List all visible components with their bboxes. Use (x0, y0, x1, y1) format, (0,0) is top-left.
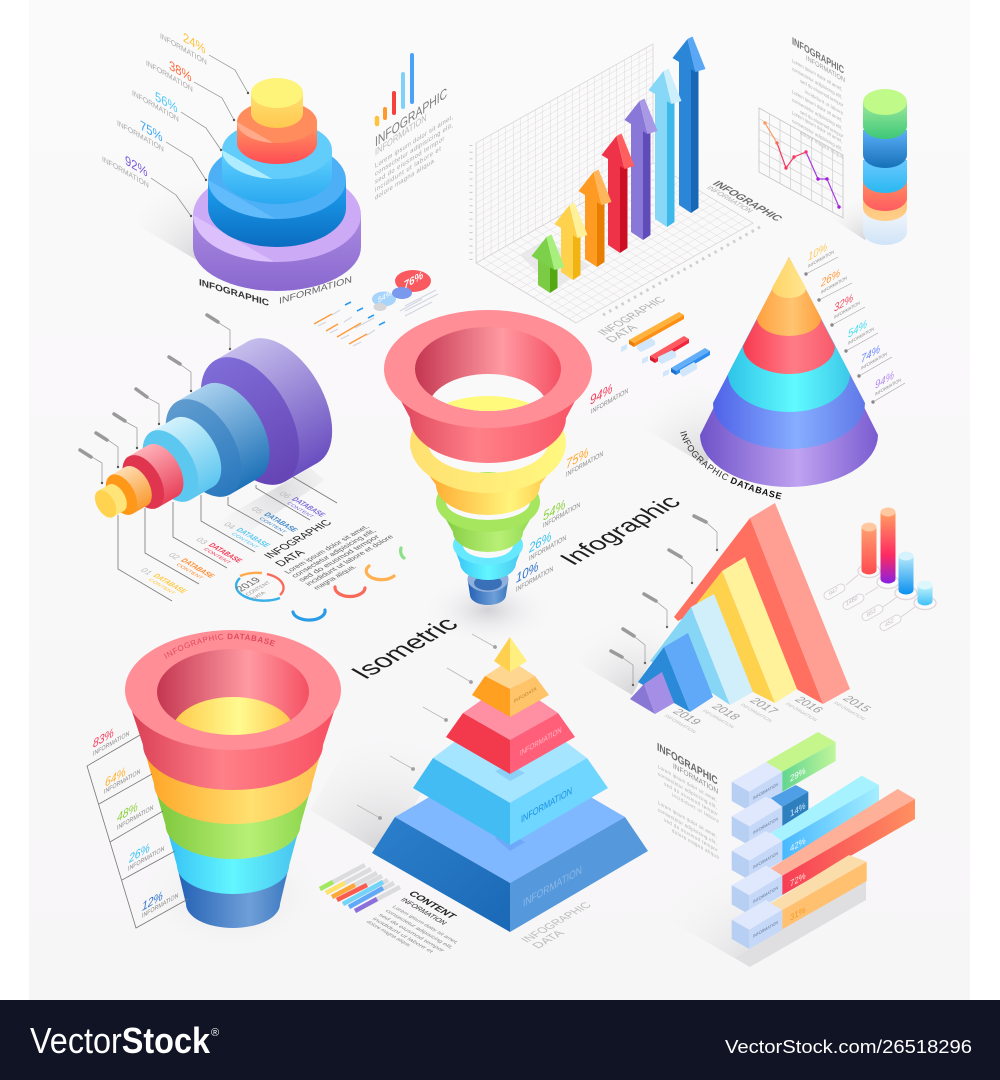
pyramid labels: INFORMATION (521, 785, 572, 826)
database labels: CONTENT (202, 547, 232, 565)
year labels: INFORMATION (738, 703, 774, 723)
top right text block: INFOGRAPHIC (792, 36, 844, 77)
level: light blue (413, 700, 608, 851)
year labels: 2015 (839, 693, 875, 714)
level: orange (472, 660, 549, 717)
database labels: 02 (166, 551, 183, 561)
title: Isometric: Isometric (344, 613, 465, 683)
bottom right bar text block: dolore magna aliqua (672, 828, 719, 861)
footer logo: VectorStock (30, 1020, 211, 1061)
year labels: 2017 (746, 695, 782, 716)
database labels: 03 (194, 536, 211, 546)
base rings (858, 564, 936, 610)
cone labels: INFOGRAPHIC DATABASE (680, 431, 782, 500)
small percentage list (314, 269, 438, 346)
mini bar icon and info text: sed do eiusmod tempor (375, 135, 445, 186)
database labels: DATABASE (289, 496, 328, 518)
step: 2017 light blue (650, 594, 753, 705)
database labels: CONTENT (174, 563, 204, 580)
row 5: 31%: INFORMATION (753, 919, 778, 939)
database labels: CONTENT (285, 501, 315, 519)
database labels: CONTENT (257, 517, 287, 534)
pyramid labels (514, 686, 582, 910)
funnel labels: INFORMATION (516, 565, 553, 594)
funnel labels: 26% (528, 528, 552, 557)
cylinder: orange (99, 461, 158, 520)
row 4: 72% (732, 789, 915, 914)
lower left funnel (125, 630, 341, 928)
funnel labels (516, 380, 628, 594)
lower left funnel: INFOGRAPHIC DATABASE (164, 634, 276, 658)
lower funnel labels: 12% (142, 888, 163, 914)
cone labels: INFORMATION (821, 275, 847, 295)
stacked cylinder labels: 92% (125, 152, 148, 180)
funnel labels: INFORMATION (591, 387, 628, 416)
cylinder: light blue (131, 407, 233, 511)
lower funnel labels: 64% (105, 764, 126, 790)
stacked cylinder labels: INFORMATION (102, 154, 149, 190)
database labels: CONTENT (229, 532, 260, 550)
lower left funnel shadow (143, 837, 323, 953)
isometric arrow chart (471, 36, 785, 323)
lower funnel labels: 26% (128, 840, 150, 867)
top right text block (792, 36, 845, 161)
layer: blue (208, 141, 346, 247)
row 2: 14%: 14% (790, 800, 806, 819)
database labels: CONTENT (146, 578, 177, 596)
funnel labels: 94% (590, 380, 613, 408)
bottom right bar text block: sed do eiusmod tempor (664, 817, 718, 854)
top right text block: consectetur adipisicing elit, (792, 118, 842, 153)
bars shadow (735, 881, 866, 967)
circle 2019: 2019 (234, 576, 264, 594)
row 2: 14%: INFORMATION (753, 816, 778, 836)
funnel labels: 54% (543, 496, 566, 524)
stacked cylinder labels: 38% (169, 57, 192, 85)
footer bar (0, 1000, 1000, 1080)
infographic data text: Lorem ipsum dolor sit amet, (282, 523, 371, 575)
stacked cylinder labels: 56% (155, 88, 178, 116)
isometric line chart (759, 108, 843, 218)
top right text block: sed do eiusmod tempor (800, 109, 844, 140)
lower funnel labels: 48% (117, 799, 138, 825)
lower funnel labels: INFORMATION (142, 892, 179, 920)
funnel labels: 75% (566, 444, 589, 472)
step: 2018 blue (638, 633, 713, 712)
ring: red (384, 310, 592, 463)
cone labels: 74% (861, 343, 880, 366)
database labels: 05 (249, 505, 266, 515)
database labels: 06 (277, 490, 294, 500)
row 1: 29% (732, 732, 836, 811)
bottom right bar text block: sed do eiusmod tempor (664, 781, 718, 818)
row 1: 29%: 29% (790, 765, 806, 784)
funnel labels: INFORMATION (566, 450, 603, 479)
content text: sed do eiusmod tempor (376, 913, 446, 953)
columns (862, 508, 932, 606)
row 4: 72%: 72% (790, 870, 806, 889)
pyramid labels: INFORMATION (520, 725, 562, 758)
mini bar icon and info text: INFORMATION (375, 112, 427, 159)
ring arcs (293, 548, 404, 620)
pyramid labels: INFORMATION (523, 864, 582, 910)
mini column chart (822, 508, 936, 632)
funnel labels: INFORMATION (529, 534, 566, 563)
stepped pyramid (357, 634, 648, 951)
mini bar icon and info text: INFOGRAPHIC (375, 84, 447, 150)
database labels: DATABASE (206, 542, 245, 564)
content text (364, 890, 460, 954)
arrow: purple (624, 98, 658, 240)
content text: INFORMATION (398, 896, 449, 926)
step: 2016 yellow (697, 557, 797, 703)
arrow: green (532, 234, 564, 293)
database labels: DATABASE (262, 511, 300, 534)
cylinder: red (114, 437, 192, 516)
value pills: 452 (885, 618, 894, 629)
top right text block: INFORMATION (806, 55, 845, 85)
pyramid labels: INFODATA (514, 686, 537, 705)
infographic data text: sed do eiusmod tempor (296, 533, 382, 583)
layer: yellow (251, 78, 303, 128)
registered mark: ® (211, 1027, 219, 1039)
mini bar icon and info text: incididunt ut labore et (375, 145, 441, 194)
top right text block: consectetur adipisicing elit, (792, 97, 842, 132)
cone labels: 10% (808, 241, 827, 264)
content text: dolore magna aliqua. (364, 920, 413, 948)
layer: purple (193, 168, 361, 291)
stacked column right (863, 89, 907, 245)
row 5: 31%: 31% (790, 904, 806, 923)
content mini bar chart (320, 865, 460, 954)
row 4: 72%: INFORMATION (753, 885, 778, 905)
row 3: 42% (732, 776, 879, 880)
lower funnel labels: INFORMATION (117, 804, 154, 832)
small 3D bars with data title: DATA (602, 322, 641, 345)
circle 2019: DATA (251, 591, 268, 601)
arrow: red (602, 134, 634, 253)
top right text block: consectetur adipisicing elit, (792, 66, 842, 101)
floor shadows (120, 145, 885, 967)
ring: blue (468, 566, 508, 605)
top right text block: Lorem ipsum dolor sit amet, (792, 110, 842, 145)
mini bar icon and info text (375, 55, 453, 202)
top right text block: incididunt ut labore (805, 89, 843, 117)
arrow: yellow (554, 202, 588, 280)
layer: orange (237, 101, 317, 164)
year labels: INFORMATION (662, 714, 698, 734)
infographic data text: magna aliqua. (311, 563, 359, 591)
top right text block: sed do eiusmod tempor (800, 78, 844, 109)
lower funnel labels: INFORMATION (128, 845, 165, 873)
value pills (822, 575, 915, 632)
year labels: INFORMATION (783, 702, 819, 722)
year labels: 2016 (791, 694, 827, 715)
ring: yellow (410, 430, 566, 515)
content text: incididunt ut labore et (370, 917, 435, 954)
year labels: INFORMATION (831, 701, 867, 721)
stacked cylinder labels: INFORMATION (132, 88, 179, 124)
year labels: 2018 (708, 701, 744, 722)
level: tip (494, 637, 527, 672)
content text: CONTENT (405, 890, 458, 921)
stacked cylinder labels: INFORMATION (117, 118, 164, 154)
leader pills (80, 315, 231, 484)
infographic data text: DATA (273, 548, 308, 569)
year labels: 2019 (669, 706, 705, 727)
small percentage list: 54% (378, 288, 392, 305)
circle 2019: CONTENT (245, 580, 273, 597)
value pills: 853 (867, 608, 876, 619)
ring: green (436, 494, 540, 552)
infographic data text: incididunt ut labore et dolore (303, 533, 396, 587)
database lines (118, 477, 337, 601)
bottom right bar text block: INFORMATION (673, 761, 718, 796)
database labels: DATABASE (179, 557, 217, 579)
mini bars (320, 865, 400, 911)
cylinder: purple (180, 321, 353, 502)
leader pills (611, 516, 718, 686)
infographic data text (262, 518, 396, 591)
database labels: 04 (221, 521, 238, 530)
infographic data text: INFOGRAPHIC (262, 518, 335, 561)
infographic data text: consectetur adipisicing elit, (289, 527, 378, 579)
arrow chart title: INFOGRAPHIC (709, 179, 785, 223)
bottom right bar text block: incididunt ut labore (672, 792, 719, 825)
content text: consectetur adipisicing elit, (383, 909, 455, 950)
stacked cylinder labels (102, 29, 352, 308)
cone chart (700, 257, 878, 487)
pyramid data title: DATA (530, 929, 568, 951)
top right text block: dolore magna aliqua (800, 130, 843, 161)
mini bar icon and info text: Lorem ipsum dolor sit amet, (375, 113, 453, 170)
row 2: 14% (732, 785, 808, 846)
cone labels: INFORMATION (861, 351, 887, 371)
layer: light blue (222, 121, 332, 204)
bottom right bar text block: INFOGRAPHIC (657, 741, 718, 788)
lower funnel labels (87, 725, 188, 928)
bottom right bar text block: Lorem ipsum dolor sit amet, (658, 764, 717, 804)
row 3: 42%: INFORMATION (753, 850, 778, 870)
content text: Lorem ipsum dolor sit amet, (390, 905, 460, 945)
database labels: 01 (138, 566, 155, 576)
top right text block: Lorem ipsum dolor sit amet, (792, 58, 842, 93)
horizontal cylinder chart (80, 315, 404, 620)
cone labels: INFORMATION (848, 326, 874, 346)
funnel labels: INFORMATION (543, 501, 580, 530)
value pills: 947 (829, 587, 838, 598)
cone labels: INFORMATION (808, 249, 834, 269)
arrow: blue (672, 36, 706, 213)
database labels: DATABASE (234, 527, 273, 549)
year labels (662, 693, 875, 734)
cone labels: INFORMATION (875, 377, 901, 397)
center funnel (384, 310, 628, 605)
stacked cylinder labels: INFORMATION (160, 31, 207, 67)
stepped triangle chart (611, 503, 875, 734)
pyramid leader lines (357, 634, 497, 820)
arrow: orange (578, 170, 612, 267)
database labels: DATABASE (151, 572, 190, 595)
row 5: 31% (732, 855, 867, 949)
level: red (446, 680, 575, 781)
grid wall and floor (471, 44, 760, 323)
mini bar icon and info text: dolore magna aliqua. (375, 156, 436, 202)
cylinder: yellow (91, 480, 131, 521)
lower funnel labels: INFORMATION (93, 730, 130, 758)
footer url: VectorStock.com/26518296 (725, 1037, 972, 1057)
cone labels: 32% (834, 292, 853, 315)
isometric bars chart (732, 732, 915, 967)
title: Infographic: Infographic (554, 492, 688, 569)
small percentage list: 76% (404, 269, 423, 292)
arrow: light blue (648, 68, 682, 227)
lower funnel labels: INFORMATION (104, 768, 141, 796)
year labels: INFORMATION (700, 709, 736, 729)
row 1: 29%: INFORMATION (753, 781, 778, 801)
center funnel shadow (426, 576, 550, 644)
cone labels: 94% (875, 369, 894, 392)
bottom right bar text block (657, 741, 719, 861)
stacked cylinder labels: 24% (183, 29, 206, 57)
level: base (372, 750, 648, 932)
cone labels: 54% (848, 318, 867, 341)
mini bar icon and info text: consectetur adipisicing elit, (375, 121, 453, 178)
stacked cylinder labels: INFORMATION (279, 274, 352, 306)
bottom right bar text block: Lorem ipsum dolor sit amet, (658, 800, 717, 840)
stacked cylinder chart (193, 78, 361, 291)
lower funnel labels: 83% (93, 725, 114, 751)
stacked cylinder labels: INFOGRAPHIC (199, 277, 269, 308)
top right text block: Lorem ipsum dolor sit amet, (792, 89, 842, 124)
cone labels: INFORMATION (834, 300, 860, 320)
funnel labels: 10% (516, 558, 539, 586)
ring: cyan (453, 538, 523, 580)
circle 2019 (234, 573, 284, 601)
pyramid data title: INFOGRAPHIC (519, 901, 595, 945)
row 3: 42%: 42% (790, 835, 806, 854)
cone labels: 26% (820, 267, 840, 291)
stacked cylinder labels: INFORMATION (146, 58, 193, 94)
step: 2019 purple (630, 672, 674, 714)
small 3D bars with data title: INFOGRAPHIC (594, 294, 669, 338)
small 3D bars with data title (594, 294, 710, 377)
database labels (138, 490, 328, 596)
arrow chart title: INFORMATION (704, 184, 755, 214)
cone labels (680, 241, 906, 500)
value pills: 1480 (846, 595, 858, 608)
step: 2015 red (674, 503, 850, 704)
cylinder: blue (150, 370, 285, 510)
stacked cylinder labels: 75% (140, 117, 163, 145)
bottom right bar text block: consectetur adipisicing elit, (658, 807, 717, 847)
bottom right bar text block: consectetur adipisicing elit, (658, 771, 717, 811)
